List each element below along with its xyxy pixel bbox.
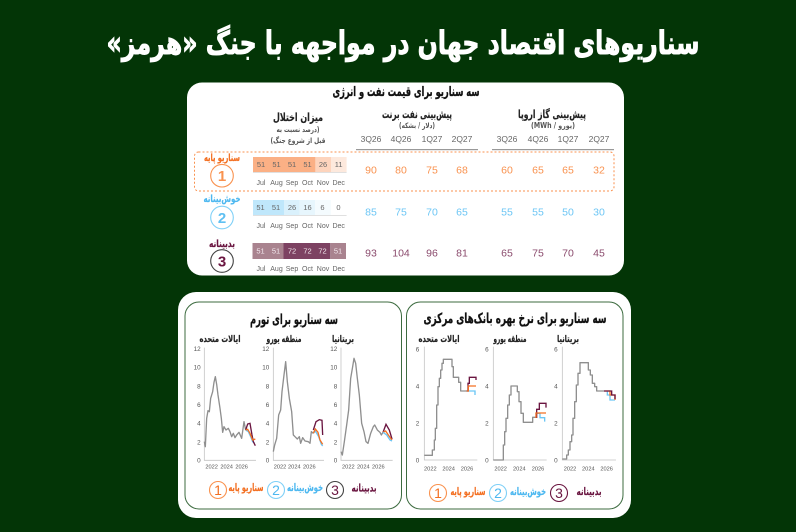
legend: interest rates: 1 [434, 485, 442, 501]
panel: white backing for lower charts [178, 292, 631, 518]
row: optimistic scenario: 55 [501, 206, 513, 218]
row: pessimistic scenario: 81 [456, 248, 468, 260]
row: base scenario: 32 [593, 164, 605, 176]
chart: UK inflation: 2022 [342, 465, 355, 471]
row: pessimistic scenario [209, 239, 605, 273]
chart: US rates [416, 347, 477, 473]
row: pessimistic scenario: 51 [334, 246, 342, 256]
row: optimistic scenario: 51 [272, 203, 280, 212]
column heading: Europe gas forecast: 1Q27 [558, 134, 579, 144]
row: pessimistic scenario: 51 [256, 246, 265, 256]
row: pessimistic scenario: 45 [593, 248, 605, 260]
row: base scenario: 51 [272, 160, 281, 169]
row: optimistic scenario: Jul [257, 223, 266, 230]
panel heading: سه سناریو برای قیمت نفت و انرژی [332, 85, 480, 100]
row: pessimistic scenario: Dec [332, 266, 345, 273]
column heading: Europe gas forecast [492, 108, 614, 150]
legend: interest rates: خوش‌بینانه [510, 486, 546, 498]
row: pessimistic scenario: 72 [288, 246, 296, 256]
row: pessimistic scenario: Oct [302, 266, 313, 273]
chart: Eurozone inflation [262, 346, 324, 471]
chart: UK rates: 2024 [582, 467, 595, 473]
line charts: interest rates [416, 347, 616, 473]
row: pessimistic scenario: 75 [532, 248, 544, 260]
chart: US rates: 2022 [424, 467, 437, 473]
row: optimistic scenario: 26 [288, 203, 296, 212]
row: pessimistic scenario: Sep [286, 266, 298, 273]
row: base scenario: 68 [456, 164, 468, 176]
row: pessimistic scenario: 65 [501, 248, 513, 260]
chart: Eurozone inflation: 8 [266, 383, 270, 390]
row: base scenario: 51 [257, 160, 265, 169]
chart: Eurozone rates [485, 347, 547, 473]
chart: US rates: 2026 [461, 467, 473, 473]
column heading: Brent forecast: 3Q26 [361, 134, 382, 144]
chart: Eurozone inflation: 2026 [303, 465, 316, 471]
legend: interest rates: سناریو پایه [450, 486, 486, 498]
row: optimistic scenario: 85 [365, 206, 377, 218]
chart: Eurozone inflation: 2024 [288, 465, 301, 471]
inflation subheadings [200, 334, 354, 345]
chart: UK inflation: 12 [330, 346, 338, 353]
chart: US inflation: 12 [194, 346, 201, 353]
row: base scenario: 11 [335, 160, 343, 169]
row: optimistic scenario: 30 [593, 206, 605, 218]
column heading: Brent forecast: پیش‌بینی نفت برنت [382, 108, 452, 121]
row: optimistic scenario: 2 [218, 210, 226, 227]
chart: US inflation: 10 [194, 365, 201, 372]
inflation heading: سه سناریو برای تورم [250, 312, 338, 328]
row: base scenario: 51 [288, 160, 296, 169]
chart: UK inflation: 2026 [372, 465, 385, 471]
chart: Eurozone rates: 2024 [513, 467, 526, 473]
column heading: Europe gas forecast: پیش‌بینی گاز اروپا [518, 108, 586, 121]
row: optimistic scenario: 16 [303, 203, 312, 212]
chart: UK rates: 2 [554, 420, 558, 427]
legend: interest rates: 3 [555, 485, 563, 501]
row: pessimistic scenario: Nov [317, 266, 330, 273]
row: optimistic scenario: Oct [302, 223, 313, 230]
chart: Eurozone inflation: 2022 [274, 465, 286, 471]
inflation subheadings: بریتانیا [332, 334, 354, 345]
column heading: Brent forecast: 4Q26 [391, 134, 412, 144]
row: base scenario: Sep [286, 180, 298, 187]
chart: Eurozone inflation: 0 [266, 458, 270, 465]
row: optimistic scenario: Aug [270, 223, 283, 230]
interest rate subheadings: ایالات متحده [418, 334, 460, 345]
row: pessimistic scenario: 96 [426, 248, 438, 260]
legend: interest rates: بدبینانه [576, 486, 602, 498]
row: base scenario: 80 [395, 164, 407, 176]
chart: Eurozone inflation: 12 [262, 346, 270, 353]
interest rate heading: سه سناریو برای نرخ بهره بانک‌های مرکزی [424, 311, 606, 327]
panel: central bank interest rate scenarios [406, 302, 623, 509]
row: optimistic scenario: 0 [336, 203, 341, 212]
row: pessimistic scenario: 72 [318, 246, 327, 256]
chart: Eurozone rates: 6 [485, 347, 489, 354]
row: optimistic scenario: 55 [532, 206, 544, 218]
row: optimistic scenario: Nov [317, 223, 330, 230]
row: optimistic scenario: 75 [395, 206, 407, 218]
row: pessimistic scenario: 93 [365, 248, 377, 260]
chart: US inflation [194, 346, 256, 471]
column heading: Brent forecast: (دلار / بشکه) [399, 121, 435, 130]
row: pessimistic scenario: Jul [257, 266, 266, 273]
chart: US rates: 6 [416, 347, 420, 354]
row: pessimistic scenario: Aug [270, 266, 283, 273]
column heading: Europe gas forecast: 2Q27 [589, 134, 610, 144]
chart: Eurozone rates: 4 [485, 383, 489, 390]
row: base scenario: Aug [270, 180, 283, 187]
chart: UK inflation: 4 [334, 421, 338, 428]
column heading: Brent forecast: 1Q27 [422, 134, 443, 144]
row: base scenario: 65 [562, 164, 574, 176]
chart: Eurozone rates: 0 [485, 457, 489, 464]
row: pessimistic scenario: 3 [218, 254, 226, 270]
interest rate subheadings [418, 334, 579, 345]
row: base scenario: 75 [426, 164, 438, 176]
chart: US inflation: 2 [197, 439, 201, 446]
chart: Eurozone rates: 2026 [532, 467, 544, 473]
chart: US inflation: 2026 [235, 465, 248, 471]
row: optimistic scenario: Dec [332, 223, 345, 230]
row: optimistic scenario: 70 [426, 206, 438, 218]
row: optimistic scenario: Sep [286, 223, 298, 230]
row: base scenario: 90 [365, 164, 377, 176]
chart: Eurozone inflation: 10 [262, 365, 270, 372]
row: pessimistic scenario: 104 [392, 248, 410, 260]
chart: US inflation: 6 [197, 402, 201, 409]
row: pessimistic scenario: 70 [562, 248, 574, 260]
inflation subheadings: ایالات متحده [200, 334, 240, 345]
row: pessimistic scenario: 72 [303, 246, 312, 256]
row: base scenario [204, 153, 605, 187]
row: pessimistic scenario: بدبینانه [209, 239, 235, 250]
chart: UK inflation: 2024 [357, 465, 370, 471]
row: optimistic scenario: 50 [562, 206, 574, 218]
row: pessimistic scenario: 51 [272, 246, 280, 256]
interest rate subheadings: منطقه یورو [493, 334, 527, 345]
row: optimistic scenario: 6 [320, 203, 325, 212]
chart: Eurozone inflation: 4 [266, 421, 270, 428]
chart: Eurozone rates: 2022 [494, 467, 507, 473]
legend: inflation: 3 [331, 482, 339, 498]
chart: Eurozone rates: 2 [485, 420, 489, 427]
column heading: disruption level [270, 111, 326, 145]
chart: US inflation: 4 [197, 421, 201, 428]
column heading: Europe gas forecast: 4Q26 [528, 134, 549, 144]
chart: Eurozone inflation: 6 [266, 402, 270, 409]
row: base scenario: 1 [218, 168, 226, 185]
column heading: disruption level: قبل از شروع جنگ) [270, 136, 326, 145]
chart: US rates: 4 [416, 383, 420, 390]
row: base scenario: سناریو پایه [204, 153, 240, 164]
interest rate subheadings: بریتانیا [557, 334, 579, 345]
chart: UK inflation: 8 [334, 383, 338, 390]
chart: Eurozone inflation: 2 [266, 439, 270, 446]
column heading: Brent forecast [356, 108, 478, 150]
chart: US inflation: 8 [197, 383, 201, 390]
row: base scenario: 65 [532, 164, 544, 176]
column heading: Brent forecast: 2Q27 [452, 134, 473, 144]
legend: interest rates [430, 484, 602, 502]
legend: inflation [210, 482, 377, 498]
row: base scenario: Nov [317, 180, 330, 187]
chart: UK inflation: 0 [334, 458, 338, 465]
legend: inflation: بدبینانه [352, 482, 377, 494]
row: base scenario: Jul [257, 180, 266, 187]
inflation subheadings: منطقه یورو [266, 334, 302, 345]
column heading: Europe gas forecast: 3Q26 [497, 134, 518, 144]
row: base scenario: Dec [332, 180, 345, 187]
chart: US rates: 0 [416, 457, 420, 464]
chart: UK rates: 4 [554, 383, 558, 390]
line charts: inflation [194, 346, 393, 471]
legend: inflation: خوش‌بینانه [287, 482, 323, 494]
row: optimistic scenario: 51 [256, 203, 265, 212]
chart: UK inflation: 6 [334, 402, 338, 409]
panel: inflation scenarios [185, 302, 402, 509]
legend: interest rates: 2 [494, 485, 502, 501]
column heading: disruption level: (درصد نسبت به [276, 125, 320, 134]
row: base scenario: Oct [302, 180, 313, 187]
legend: inflation: سناریو پایه [228, 482, 264, 494]
chart: UK rates [554, 347, 616, 473]
dashed highlight: base scenario [194, 152, 614, 191]
panel: oil and energy price scenarios [187, 82, 624, 276]
chart: US rates: 2024 [442, 467, 455, 473]
legend: inflation: 2 [272, 482, 280, 498]
chart: US inflation: 2024 [220, 465, 233, 471]
column heading: Europe gas forecast: (یورو / MWh) [531, 121, 575, 130]
row: base scenario: 26 [319, 160, 327, 169]
row: optimistic scenario [204, 194, 605, 230]
chart: UK rates: 2026 [600, 467, 613, 473]
chart: UK inflation [330, 346, 393, 471]
chart: UK rates: 6 [554, 347, 558, 354]
column heading: disruption level: میزان اختلال [273, 111, 323, 124]
row: optimistic scenario: خوش‌بینانه [204, 194, 240, 205]
chart: UK rates: 2022 [564, 467, 576, 473]
chart: UK inflation: 2 [334, 439, 338, 446]
chart: US inflation: 0 [197, 458, 201, 465]
chart: UK inflation: 10 [330, 365, 338, 372]
row: optimistic scenario: 65 [456, 206, 468, 218]
row: base scenario: 60 [501, 164, 513, 176]
row: base scenario: 51 [303, 160, 312, 169]
chart: US rates: 2 [416, 420, 420, 427]
chart: UK rates: 0 [554, 457, 558, 464]
chart: US inflation: 2022 [205, 465, 218, 471]
legend: inflation: 1 [214, 482, 222, 498]
